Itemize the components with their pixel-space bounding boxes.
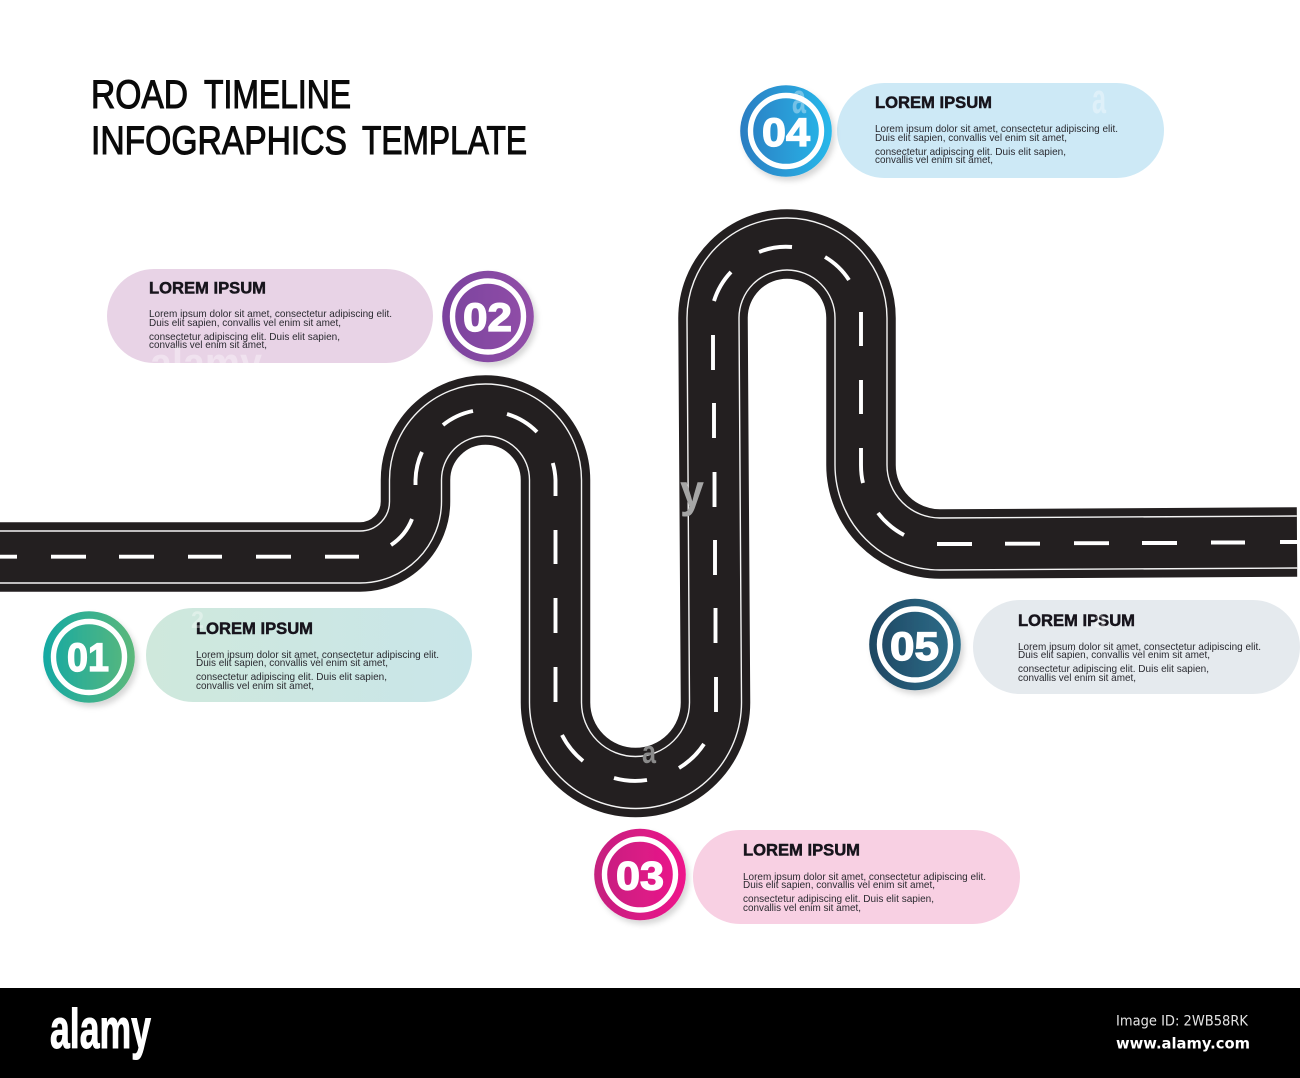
stock watermark fragments: a (1094, 607, 1107, 634)
stock watermark fragments (150, 75, 1107, 770)
stock watermark fragments: y (680, 465, 704, 517)
title: TEMPLATE (362, 119, 527, 163)
lane dashes (0, 247, 1297, 781)
title: INFOGRAPHICS (91, 119, 347, 163)
badge 05: 05 (890, 625, 939, 669)
stock watermark fragments: alamy (150, 339, 262, 388)
badge 04: 04 (762, 111, 811, 155)
text 02: convallis vel enim sit amet, (149, 339, 267, 351)
pill 01 (146, 608, 472, 702)
text 03: convallis vel enim sit amet, (743, 902, 861, 914)
text 01: consectetur adipiscing elit. Duis elit sapien, (196, 671, 387, 683)
badge 02 (442, 271, 534, 362)
text 01: Duis elit sapien, convallis vel enim sit amet, (196, 657, 388, 669)
text 05: LOREM IPSUM (1018, 611, 1135, 630)
text 04: Lorem ipsum dolor sit amet, consectetur adipiscing elit. (875, 123, 1118, 135)
text 04 (875, 93, 1118, 166)
text 04: consectetur adipiscing elit. Duis elit sapien, (875, 146, 1066, 158)
text 02: LOREM IPSUM (149, 278, 266, 298)
footer bar (0, 988, 1300, 1078)
stock watermark fragments: 2 (191, 607, 204, 634)
winding road (0, 244, 1297, 782)
text 03: LOREM IPSUM (743, 840, 860, 860)
pill 03 (693, 830, 1020, 924)
badge 03: 03 (616, 854, 664, 898)
text 04: convallis vel enim sit amet, (875, 154, 993, 166)
stock watermark fragments: a (642, 734, 656, 770)
text 03: Lorem ipsum dolor sit amet, consectetur adipiscing elit. (743, 871, 986, 883)
stock watermark fragments: a (792, 75, 806, 122)
pill 05 (973, 600, 1300, 694)
footer image id: Image ID: 2WB58RK (1116, 1014, 1249, 1030)
text 03: Duis elit sapien, convallis vel enim sit amet, (743, 879, 935, 891)
badge 01: 01 (67, 636, 109, 680)
text 05: consectetur adipiscing elit. Duis elit sapien, (1018, 663, 1209, 675)
pill 02 (107, 269, 433, 363)
stock watermark fragments: a (1092, 75, 1106, 122)
text 02: Lorem ipsum dolor sit amet, consectetur adipiscing elit. (149, 308, 392, 320)
title (91, 73, 527, 163)
text 03 (743, 840, 986, 914)
text 02: Duis elit sapien, convallis vel enim sit amet, (149, 317, 341, 329)
footer image id: www.alamy.com (1116, 1034, 1250, 1052)
step 03 (594, 829, 1020, 924)
badge 01 (43, 611, 135, 703)
pill 04 (837, 83, 1164, 178)
text 02: consectetur adipiscing elit. Duis elit sapien, (149, 331, 340, 343)
text 02 (149, 278, 392, 351)
step 04 (740, 83, 1164, 178)
text 01: LOREM IPSUM (196, 619, 313, 638)
text 05: convallis vel enim sit amet, (1018, 672, 1136, 684)
footer logo: alamy (50, 997, 151, 1060)
text 04: Duis elit sapien, convallis vel enim sit amet, (875, 132, 1067, 144)
step 05 (869, 599, 1300, 694)
badge 05 (869, 599, 961, 690)
step 01 (43, 608, 472, 703)
step 02 (107, 269, 534, 363)
badge 03 (594, 829, 686, 920)
text 05: Duis elit sapien, convallis vel enim sit amet, (1018, 649, 1210, 661)
title: TIMELINE (204, 73, 351, 117)
footer image id (1116, 1014, 1250, 1052)
text 03: consectetur adipiscing elit. Duis elit sapien, (743, 893, 934, 905)
text 05: Lorem ipsum dolor sit amet, consectetur adipiscing elit. (1018, 641, 1261, 653)
text 04: LOREM IPSUM (875, 93, 992, 112)
text 01 (196, 619, 439, 692)
title: ROAD (91, 73, 188, 117)
badge 04 (740, 85, 832, 177)
badge 02: 02 (463, 296, 512, 340)
text 05 (1018, 611, 1261, 684)
text 01: Lorem ipsum dolor sit amet, consectetur adipiscing elit. (196, 649, 439, 661)
text 01: convallis vel enim sit amet, (196, 680, 314, 692)
